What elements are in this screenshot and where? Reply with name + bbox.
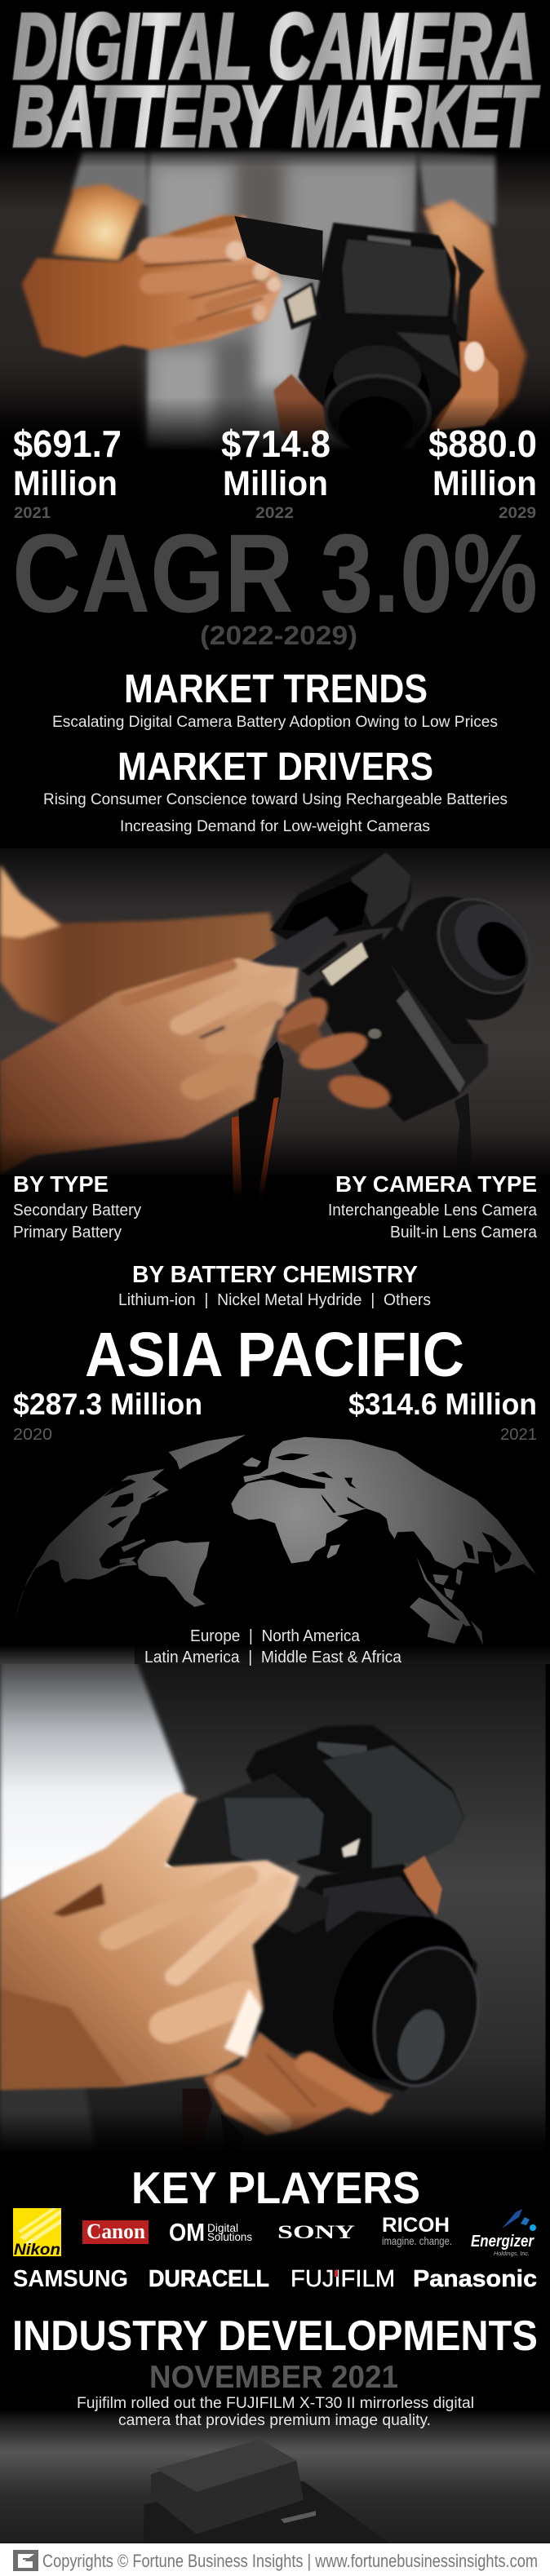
market trends heading: MARKET TRENDS [124, 667, 428, 711]
stat: 2021 market size: 2021 [14, 505, 51, 522]
logo: Energizer [471, 2209, 536, 2257]
logo: Duracell: DURACELL [149, 2266, 269, 2292]
stat: 2022 market size: Million [223, 464, 328, 503]
item: secondary battery: Secondary Battery [13, 1202, 141, 1219]
market driver two: Increasing Demand for Low-weight Cameras [120, 818, 430, 835]
New Zealand [471, 1621, 483, 1645]
development description [77, 2395, 474, 2429]
Great Lakes [108, 1516, 128, 1528]
development description: camera that provides premium image quality. [118, 2412, 431, 2429]
stat: Asia Pacific 2021 [348, 1388, 537, 1444]
Sea of Japan [481, 1532, 512, 1567]
Greenland [169, 1435, 246, 1470]
stat: 2029 market size: 2029 [499, 505, 536, 522]
region list: Latin America | Middle East & Africa [144, 1649, 402, 1666]
Red Sea [322, 1494, 336, 1513]
logo: Ricoh [382, 2214, 452, 2247]
logo: Energizer: Energizer [471, 2233, 534, 2251]
development date: NOVEMBER 2021 [149, 2360, 398, 2395]
stat: 2021 market size: $691.7 [13, 423, 122, 465]
Borneo [432, 1574, 449, 1585]
region heading: Asia Pacific: ASIA PACIFIC [85, 1320, 464, 1390]
heading: by battery chemistry: BY BATTERY CHEMISTRY [132, 1262, 418, 1288]
items: chemistries: Lithium-ion | Nickel Metal Hydride | Others [118, 1291, 431, 1309]
logo: OM Digital Solutions [169, 2218, 252, 2246]
globe map [14, 1435, 536, 1645]
stat: 2021 market size: Million [13, 464, 118, 503]
stat: Asia Pacific 2021: $314.6 Million [348, 1388, 537, 1421]
logo: Energizer: Holdings, Inc. [494, 2251, 530, 2257]
Bohai [463, 1540, 475, 1560]
logo: OM Digital Solutions: Digital [207, 2221, 238, 2234]
photo: battery on charger [0, 2409, 550, 2543]
logo: Nikon: Nikon [14, 2242, 60, 2259]
photo: hand inserting battery into camera [0, 142, 550, 455]
market driver one: Rising Consumer Conscience toward Using Rechargeable Batteries [43, 791, 508, 808]
stat: 2029 market size: Million [432, 464, 537, 503]
section: by type [13, 1171, 141, 1242]
Hudson Bay [110, 1493, 133, 1507]
Labrador gap [147, 1490, 161, 1498]
Madagascar [326, 1544, 340, 1559]
heading: key players: KEY PLAYERS [131, 2162, 420, 2213]
North America [14, 1469, 169, 1623]
market trends text: Escalating Digital Camera Battery Adoption Owing to Low Prices [52, 714, 498, 731]
Black Sea [312, 1472, 334, 1479]
Sumatra and Java arc [416, 1556, 471, 1626]
logo: Ricoh: imagine. change. [382, 2234, 452, 2247]
Central islands [120, 1556, 136, 1564]
stat: 2029 market size: $880.0 [428, 423, 537, 465]
photo: hands sliding battery into camera base [0, 848, 550, 1197]
icon: Fortune Business Insights logo [13, 2550, 38, 2571]
Cuba [121, 1539, 145, 1552]
stat: 2021 market size [13, 423, 122, 522]
region list [144, 1627, 402, 1666]
Philippines [456, 1569, 463, 1585]
stat: 2022 market size [221, 423, 330, 522]
stat: Asia Pacific 2021: 2021 [500, 1426, 537, 1444]
logo: Fujifilm: FUJIFILM [291, 2266, 395, 2292]
Australia [410, 1597, 464, 1644]
Sulawesi [444, 1588, 455, 1600]
Persian Gulf [347, 1497, 366, 1508]
stat: 2022 market size: $714.8 [221, 423, 330, 465]
logo: Nikon [13, 2208, 61, 2259]
development description: Fujifilm rolled out the FUJIFILM X-T30 II mirrorless digital [77, 2395, 474, 2412]
UK [242, 1458, 261, 1467]
logo: Sony: SONY [277, 2222, 356, 2242]
Mediterranean [261, 1472, 325, 1489]
stat: Asia Pacific 2020: 2020 [13, 1426, 52, 1444]
heading: by camera type: BY CAMERA TYPE [335, 1171, 537, 1197]
logo: Samsung: SAMSUNG [13, 2266, 128, 2292]
logo: Panasonic: Panasonic [413, 2266, 537, 2292]
region list: Europe | North America [190, 1627, 361, 1645]
logo: OM Digital Solutions: OM [169, 2218, 205, 2246]
Caspian [344, 1478, 357, 1489]
South America [137, 1540, 210, 1607]
section: by battery chemistry [118, 1262, 431, 1309]
item: primary battery: Primary Battery [13, 1224, 122, 1242]
CAGR period: (2022-2029) [200, 621, 357, 650]
logo: Ricoh: RICOH [382, 2214, 450, 2237]
photo: hands holding camera and battery [0, 1645, 550, 2153]
Baltic [275, 1454, 310, 1460]
lead-in shirt fade [0, 1645, 135, 1664]
item: built-in lens camera: Built-in Lens Camera [390, 1224, 538, 1242]
stat: 2029 market size [428, 423, 537, 522]
logo: Canon: Canon [86, 2220, 146, 2243]
logo: OM Digital Solutions: Solutions [207, 2230, 252, 2243]
Yellow Sea [477, 1551, 495, 1573]
Eurasia and Africa [231, 1437, 536, 1574]
title [13, 0, 539, 165]
section: by camera type [328, 1171, 538, 1242]
footer [0, 2543, 550, 2576]
stat: Asia Pacific 2020 [13, 1388, 202, 1444]
market drivers heading: MARKET DRIVERS [118, 746, 433, 789]
lead-in fade [0, 1645, 550, 1664]
black band behind players [0, 2153, 550, 2414]
Arctic gaps [104, 1479, 136, 1497]
heading: by type: BY TYPE [13, 1171, 109, 1197]
stat: Asia Pacific 2020: $287.3 Million [13, 1388, 202, 1421]
item: interchangeable lens camera: Interchangeable Lens Camera [328, 1202, 538, 1219]
stat: 2022 market size: 2022 [255, 505, 294, 522]
